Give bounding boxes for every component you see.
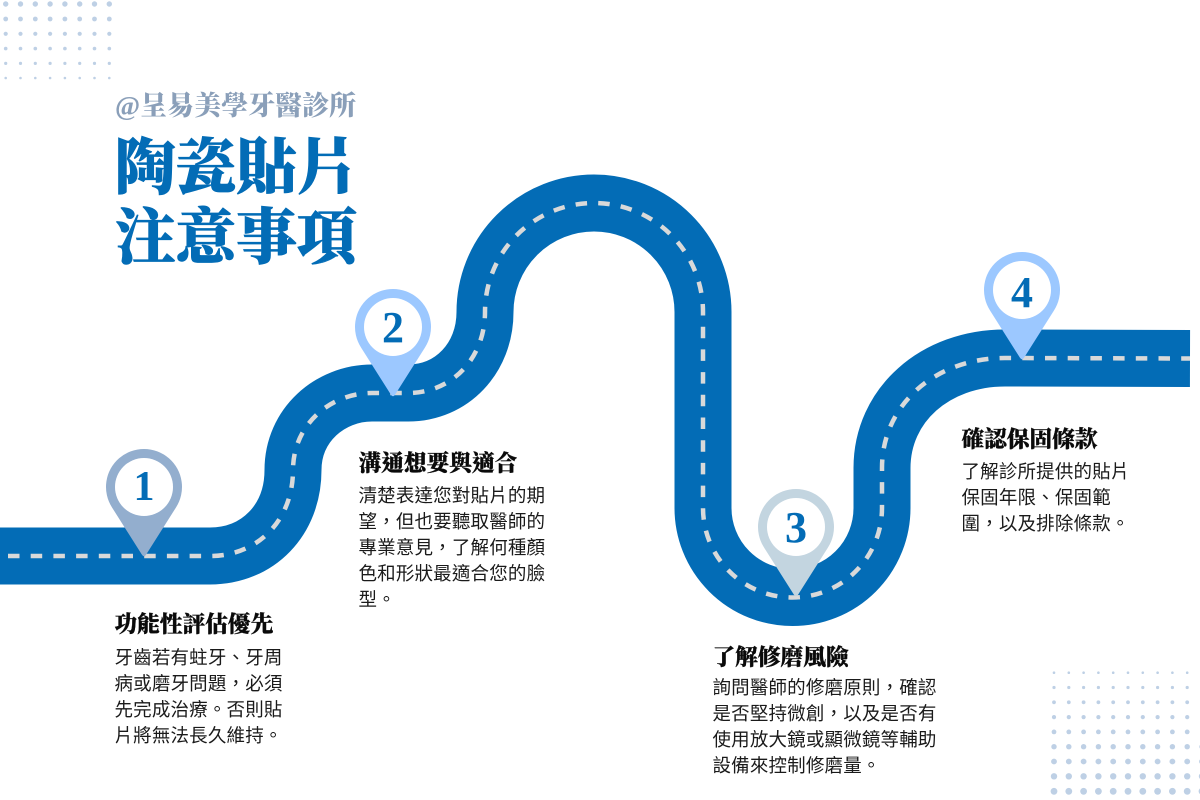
step 3 body: 使用放大鏡或顯微鏡等輔助 <box>712 729 937 750</box>
winding road <box>0 203 1190 598</box>
map pin 4: 4 <box>1011 268 1033 317</box>
step 2 body: 型。 <box>358 589 396 610</box>
step 2 body: 專業意見，了解何種顏 <box>358 537 546 558</box>
step 3 heading: 了解修磨風險 <box>712 644 850 670</box>
step 3 body: 詢問醫師的修磨原則，確認 <box>712 677 937 698</box>
step 4 heading: 確認保固條款 <box>962 426 1098 452</box>
step 4 body <box>962 461 1130 534</box>
step 4 body: 圍，以及排除條款。 <box>962 513 1130 534</box>
step 1 body: 先完成治療。否則貼 <box>114 699 283 720</box>
step 1 text <box>114 611 283 746</box>
step 1 body: 牙齒若有蛀牙、牙周 <box>114 647 283 668</box>
step 2 body: 清楚表達您對貼片的期 <box>358 485 545 506</box>
step 3 body: 是否堅持微創，以及是否有 <box>712 703 937 724</box>
step 1 body: 片將無法長久維持。 <box>114 725 283 746</box>
step 3 text <box>712 644 937 776</box>
title: 陶瓷貼片 <box>115 135 357 202</box>
step 2 body: 望，但也要聽取醫師的 <box>358 511 545 532</box>
step 2 heading: 溝通想要與適合 <box>358 450 518 476</box>
map pin 3: 3 <box>785 503 807 552</box>
step 1 body <box>114 647 283 746</box>
step 3 body: 設備來控制修磨量。 <box>712 755 881 776</box>
step 2 text <box>358 450 546 610</box>
step 1 heading: 功能性評估優先 <box>114 611 274 637</box>
map pin 4 <box>984 252 1060 359</box>
title: 注意事項 <box>115 203 359 272</box>
step 4 body: 了解診所提供的貼片 <box>962 461 1130 482</box>
step 4 text <box>962 426 1130 534</box>
map pin 2: 2 <box>382 303 404 352</box>
step 3 body <box>712 677 937 776</box>
clinic name subtitle: @呈易美學牙醫診所 <box>115 90 356 121</box>
step 1 body: 病或磨牙問題，必須 <box>114 673 283 694</box>
step 2 body: 色和形狀最適合您的臉 <box>358 563 545 584</box>
title <box>115 135 359 272</box>
step 4 body: 保固年限、保固範 <box>962 487 1111 508</box>
map pin 3 <box>758 489 834 596</box>
map pin 2 <box>355 289 431 396</box>
step 2 body <box>358 485 546 610</box>
map pin 1 <box>106 449 182 556</box>
map pin 1: 1 <box>134 464 154 510</box>
